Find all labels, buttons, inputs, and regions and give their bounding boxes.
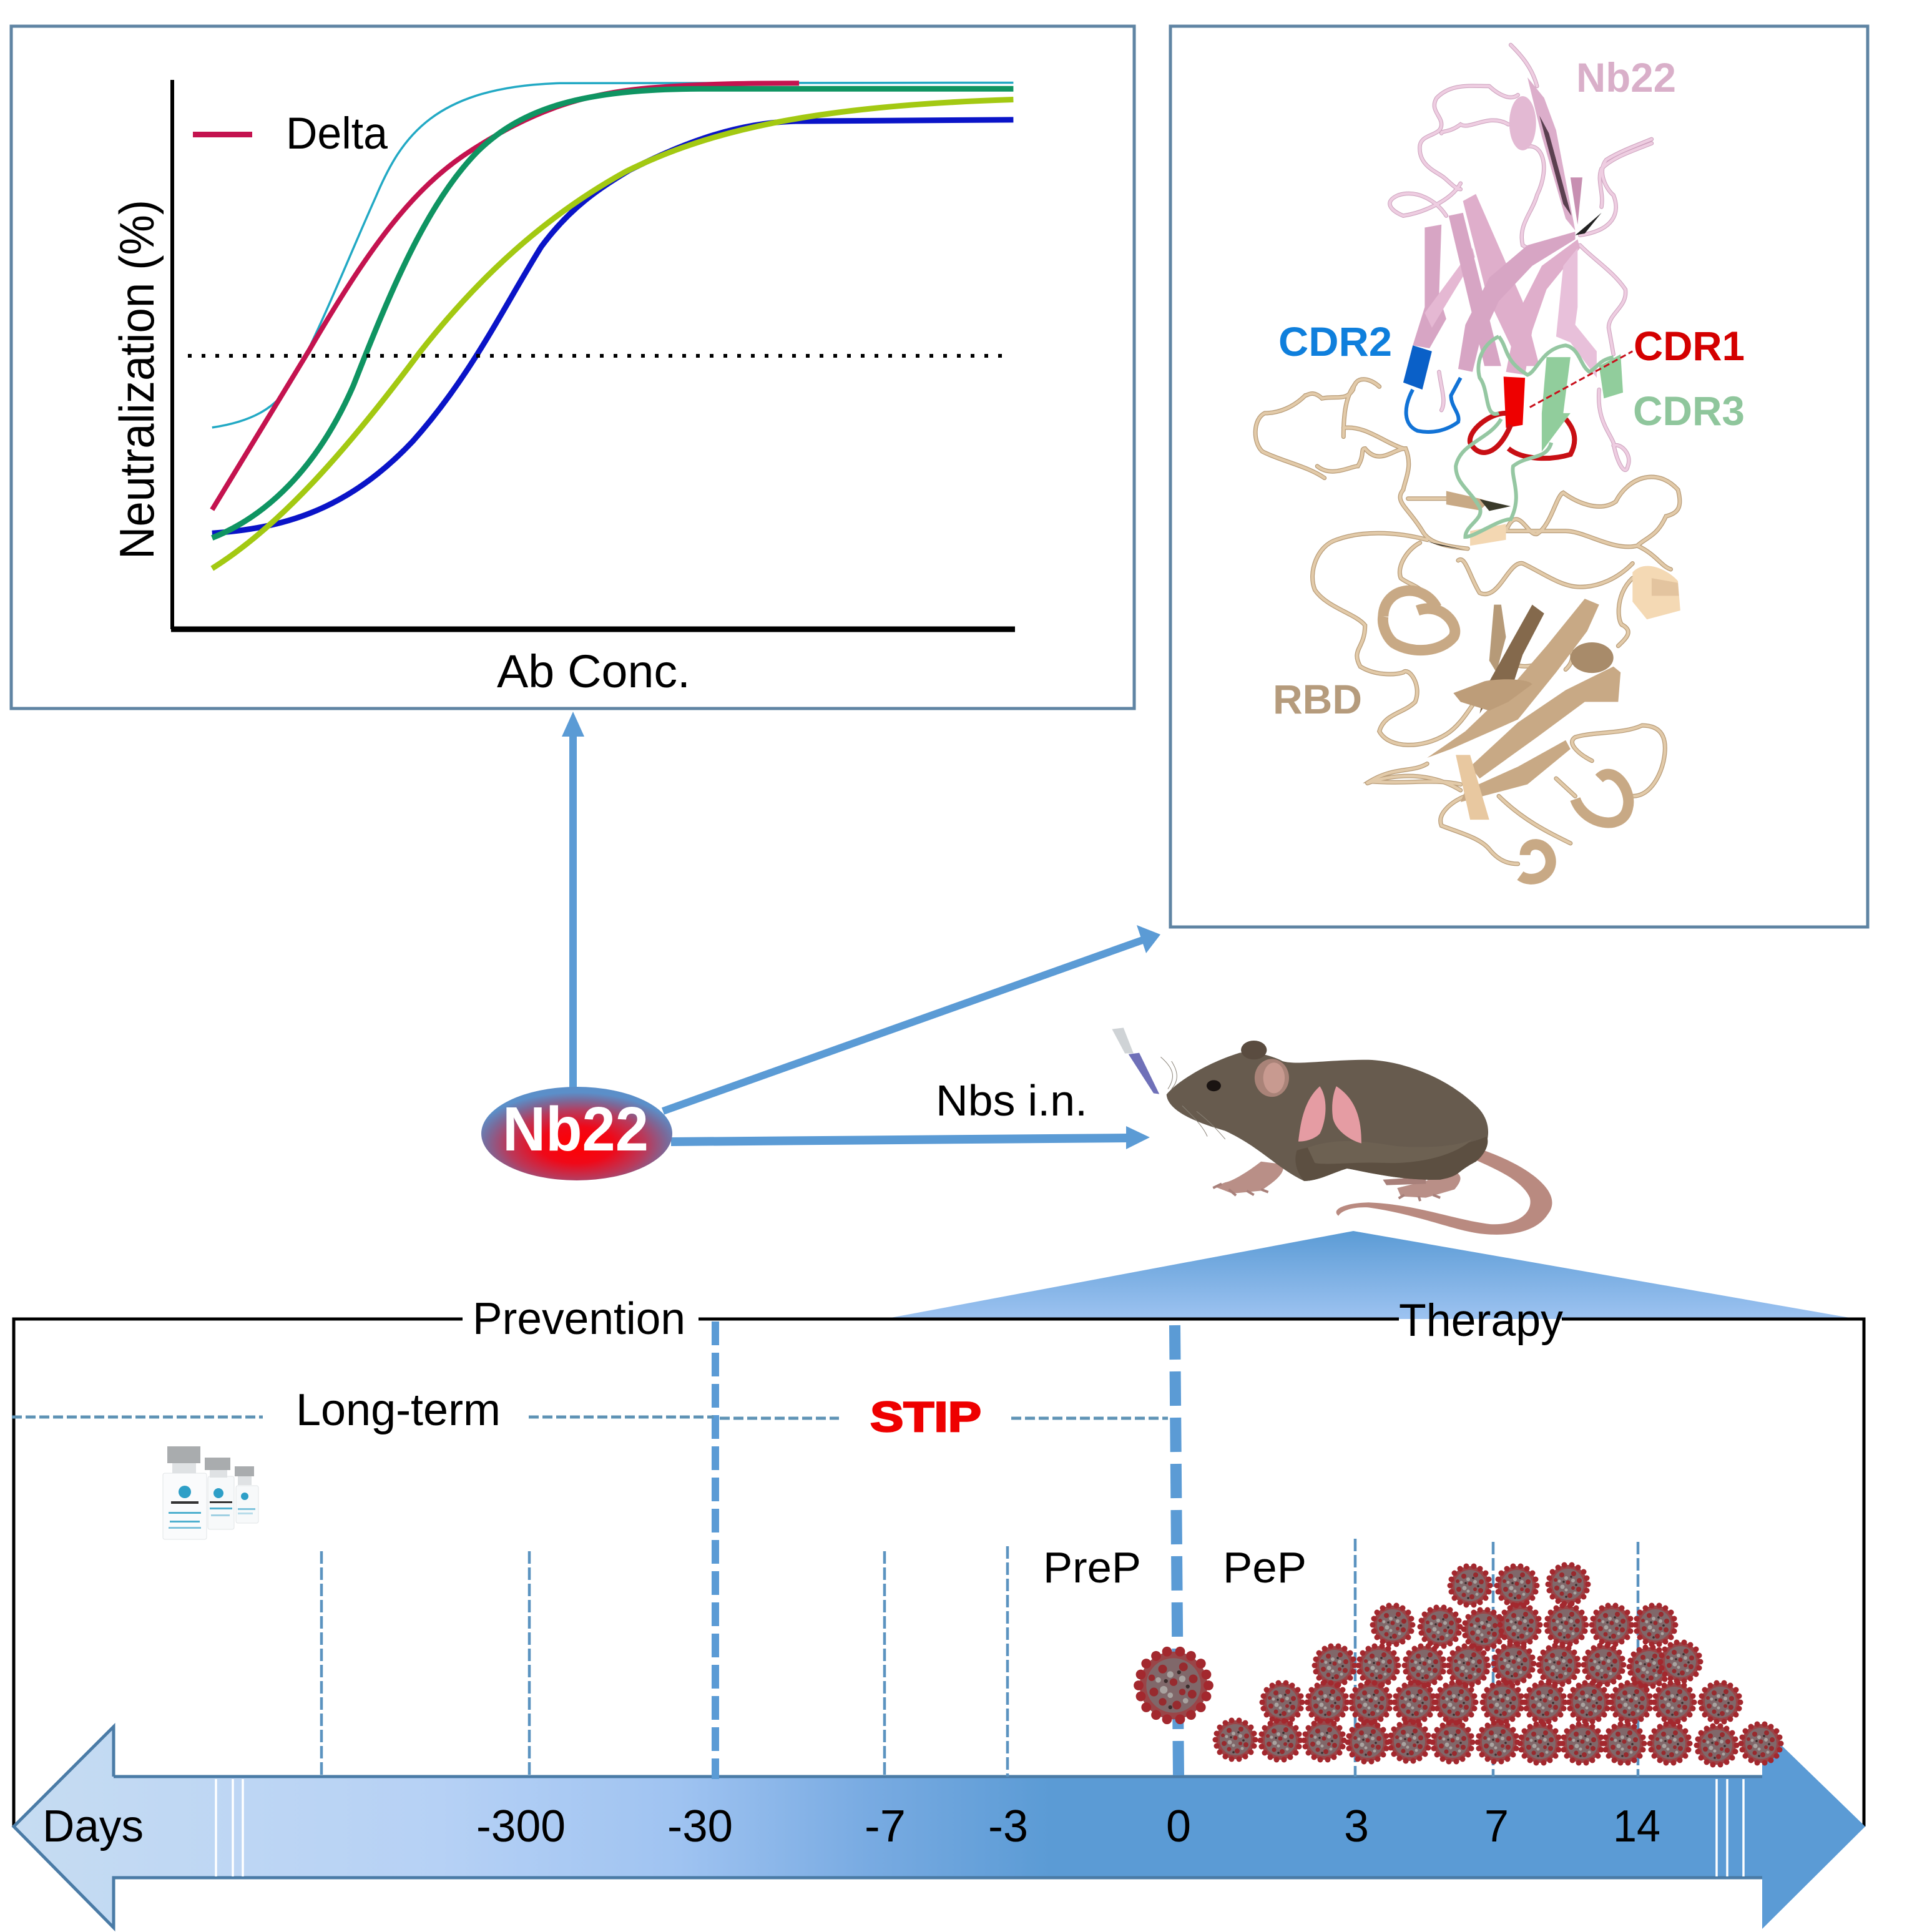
STIP span dashed line [720,1417,1168,1420]
timeline labels: -300 [476,1802,566,1851]
blue trapezoid linking mouse to therapy [884,1231,1857,1319]
arrow: Nb22 to chart [562,712,584,1091]
Nb22 ellipse [481,1087,672,1180]
label: STIP: STIP [870,1393,981,1441]
timeline frame [14,1319,1864,1827]
icon: single virus at day 0 [1134,1647,1213,1724]
whiskers [1160,1057,1225,1139]
label: Nb22: Nb22 [1576,54,1676,101]
neutralization curves [212,82,1013,569]
heading: Therapy: Therapy [1399,1295,1563,1346]
CDR1 leader line [1530,351,1632,407]
x axis label: Ab Conc. [497,645,690,697]
panel: Nb22 RBD structure [1170,26,1868,927]
heading: Prevention: Prevention [473,1294,685,1344]
mouse body [1167,1052,1488,1181]
axis break marks [216,1779,1743,1876]
timeline labels: Days [42,1802,144,1851]
RBD ribbon [1255,380,1680,879]
Nb22 ribbon [1390,45,1652,537]
label: CDR1: CDR1 [1634,323,1745,369]
timeline labels: 7 [1484,1802,1509,1851]
mouse tail [1336,1149,1552,1235]
legend: Delta: Delta [286,109,388,159]
mouse eye [1207,1080,1221,1091]
label: CDR2: CDR2 [1278,318,1392,365]
chart axes [171,80,1015,629]
timeline labels: 0 [1166,1802,1191,1851]
arrow: Nb22 to mouse [671,1126,1150,1149]
arrow: Nb22 to structure [663,925,1160,1111]
timeline labels [42,1802,1660,1851]
timeline arrow [14,1727,1865,1929]
label: Nbs i.n.: Nbs i.n. [936,1076,1087,1125]
timeline labels: -7 [865,1802,906,1851]
label: CDR3: CDR3 [1633,388,1745,434]
day tick lines [321,1539,1638,1777]
CDR3 loop [1456,336,1623,537]
virus load pile [1212,1562,1784,1768]
timeline labels: 3 [1344,1802,1369,1851]
long-term span dashed line [12,1416,713,1418]
mouse lungs [1298,1086,1361,1144]
timeline labels: 14 [1613,1802,1660,1851]
label: Long-term: Long-term [296,1385,501,1435]
thick dashed line: day -30 [712,1322,719,1779]
y axis label: Neutralization (%) [109,200,164,559]
panel: neutralization chart [11,26,1134,709]
Nb22 ellipse: Nb22 [503,1094,649,1164]
label: PeP: PeP [1223,1543,1307,1592]
timeline labels: -30 [667,1802,733,1851]
label: PreP: PreP [1043,1543,1141,1592]
label: RBD: RBD [1273,676,1362,722]
timeline labels: -3 [988,1802,1028,1851]
icon: mouse with nasal pipette [1112,1027,1552,1235]
legend: Delta [193,109,388,159]
CDR2 loop [1403,345,1461,432]
threshold dotted line [188,354,1002,358]
thick dashed line: day 0 [1175,1325,1179,1776]
icon: pipette [1112,1027,1159,1094]
icon: vaccine vials [163,1446,258,1539]
mouse ears [1241,1041,1289,1097]
mouse legs [1213,1162,1461,1201]
CDR1 loop [1470,376,1574,458]
